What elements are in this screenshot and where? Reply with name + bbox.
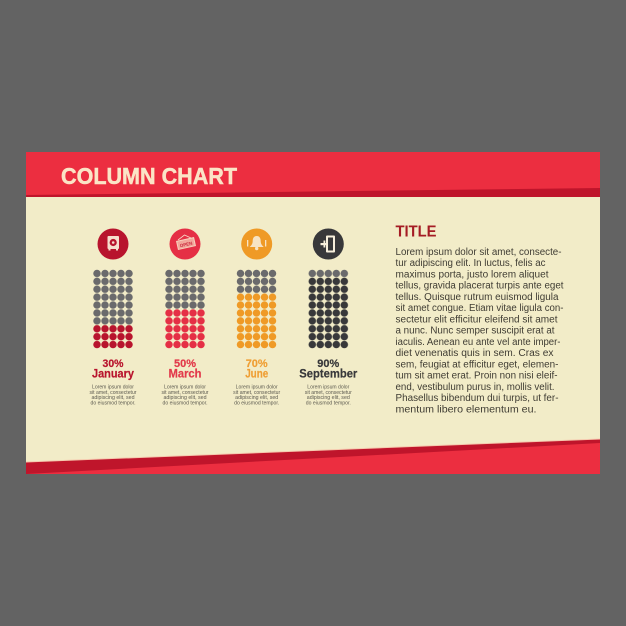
body paragraph: tellus, gravida placerat turpis ante eget	[396, 281, 564, 292]
body paragraph: a nunc. Nunc semper suscipit erat at	[396, 326, 555, 337]
value and month	[92, 358, 135, 380]
body paragraph: mentum libero elementum eu.	[396, 404, 536, 415]
body paragraph: tum sit amet erat. Proin non nisi eleif-	[396, 371, 558, 382]
caption: sit amet, consectetur	[233, 390, 281, 396]
body paragraph: tur adipiscing elit. In luctus, felis ac	[396, 258, 546, 269]
column: March	[162, 228, 209, 406]
panel: slide	[26, 152, 600, 474]
body paragraph: Phasellus bibendum dui turpis, ut fer-	[396, 393, 558, 404]
body paragraph: tellus. Quisque rutrum euismod ligula	[396, 292, 559, 303]
dot column 90%	[308, 270, 348, 348]
dot column 30%	[93, 270, 133, 348]
body paragraph: iaculis. Aenean eu ante vel ante imper-	[396, 337, 560, 348]
caption: adipiscing elit, sed	[235, 395, 278, 401]
body paragraph: maximus porta, justo lorem aliquet	[396, 270, 549, 280]
body paragraph: sit amet congue. Etiam vitae ligula con-	[396, 303, 564, 314]
caption: do eiusmod tempor.	[90, 400, 136, 406]
icon: safe	[98, 228, 128, 260]
value and month	[168, 358, 202, 380]
column: June	[233, 228, 281, 406]
caption: sit amet, consectetur	[162, 390, 209, 396]
heading: column chart: COLUMN CHART	[61, 163, 237, 189]
value and month	[299, 358, 358, 380]
caption: adipiscing elit, sed	[307, 395, 350, 401]
icon: open sign	[170, 228, 200, 260]
caption: Lorem ipsum dolor	[236, 384, 278, 390]
caption: do eiusmod tempor.	[234, 400, 279, 406]
caption: adipiscing elit, sed	[164, 395, 207, 401]
body paragraph: diet venenatis quis in sem. Cras ex	[396, 348, 554, 359]
caption: Lorem ipsum dolor	[92, 384, 134, 390]
caption: Lorem ipsum dolor	[307, 384, 350, 390]
value and month: June	[245, 368, 268, 380]
body paragraph	[396, 247, 564, 415]
value and month: 90%	[317, 358, 340, 370]
body paragraph: sem, feugiat at efficitur eget, elemen-	[396, 359, 558, 370]
column: September	[299, 228, 358, 406]
caption	[90, 384, 137, 406]
caption	[233, 384, 281, 406]
value and month: 30%	[102, 358, 124, 370]
caption: do eiusmod tempor.	[162, 400, 208, 406]
footer band	[26, 438, 600, 474]
caption: do eiusmod tempor.	[306, 400, 351, 406]
value and month: January	[92, 368, 135, 380]
dot column 70%	[236, 270, 276, 348]
caption: sit amet, consectetur	[305, 390, 352, 396]
column: January	[90, 228, 137, 406]
body paragraph: sectetur elit efficitur eleifend sit amet	[396, 314, 558, 325]
text block title: TITLE	[396, 224, 437, 240]
value and month: September	[299, 368, 358, 380]
caption: adipiscing elit, sed	[92, 395, 135, 401]
icon: door	[313, 228, 344, 260]
caption: sit amet, consectetur	[90, 390, 137, 396]
body paragraph: end, vestibulum purus in, mollis velit.	[396, 382, 554, 393]
caption	[305, 384, 352, 406]
icon: open sign: OPEN	[179, 241, 193, 248]
dot column 50%	[165, 270, 205, 348]
caption: Lorem ipsum dolor	[164, 384, 206, 390]
value and month: 70%	[246, 358, 268, 370]
header band	[26, 152, 600, 197]
value and month: 50%	[174, 358, 196, 370]
caption	[162, 384, 209, 406]
icon: bell	[241, 228, 272, 260]
body paragraph: Lorem ipsum dolor sit amet, consecte-	[396, 247, 562, 258]
value and month: March	[168, 368, 202, 380]
value and month	[245, 358, 268, 380]
